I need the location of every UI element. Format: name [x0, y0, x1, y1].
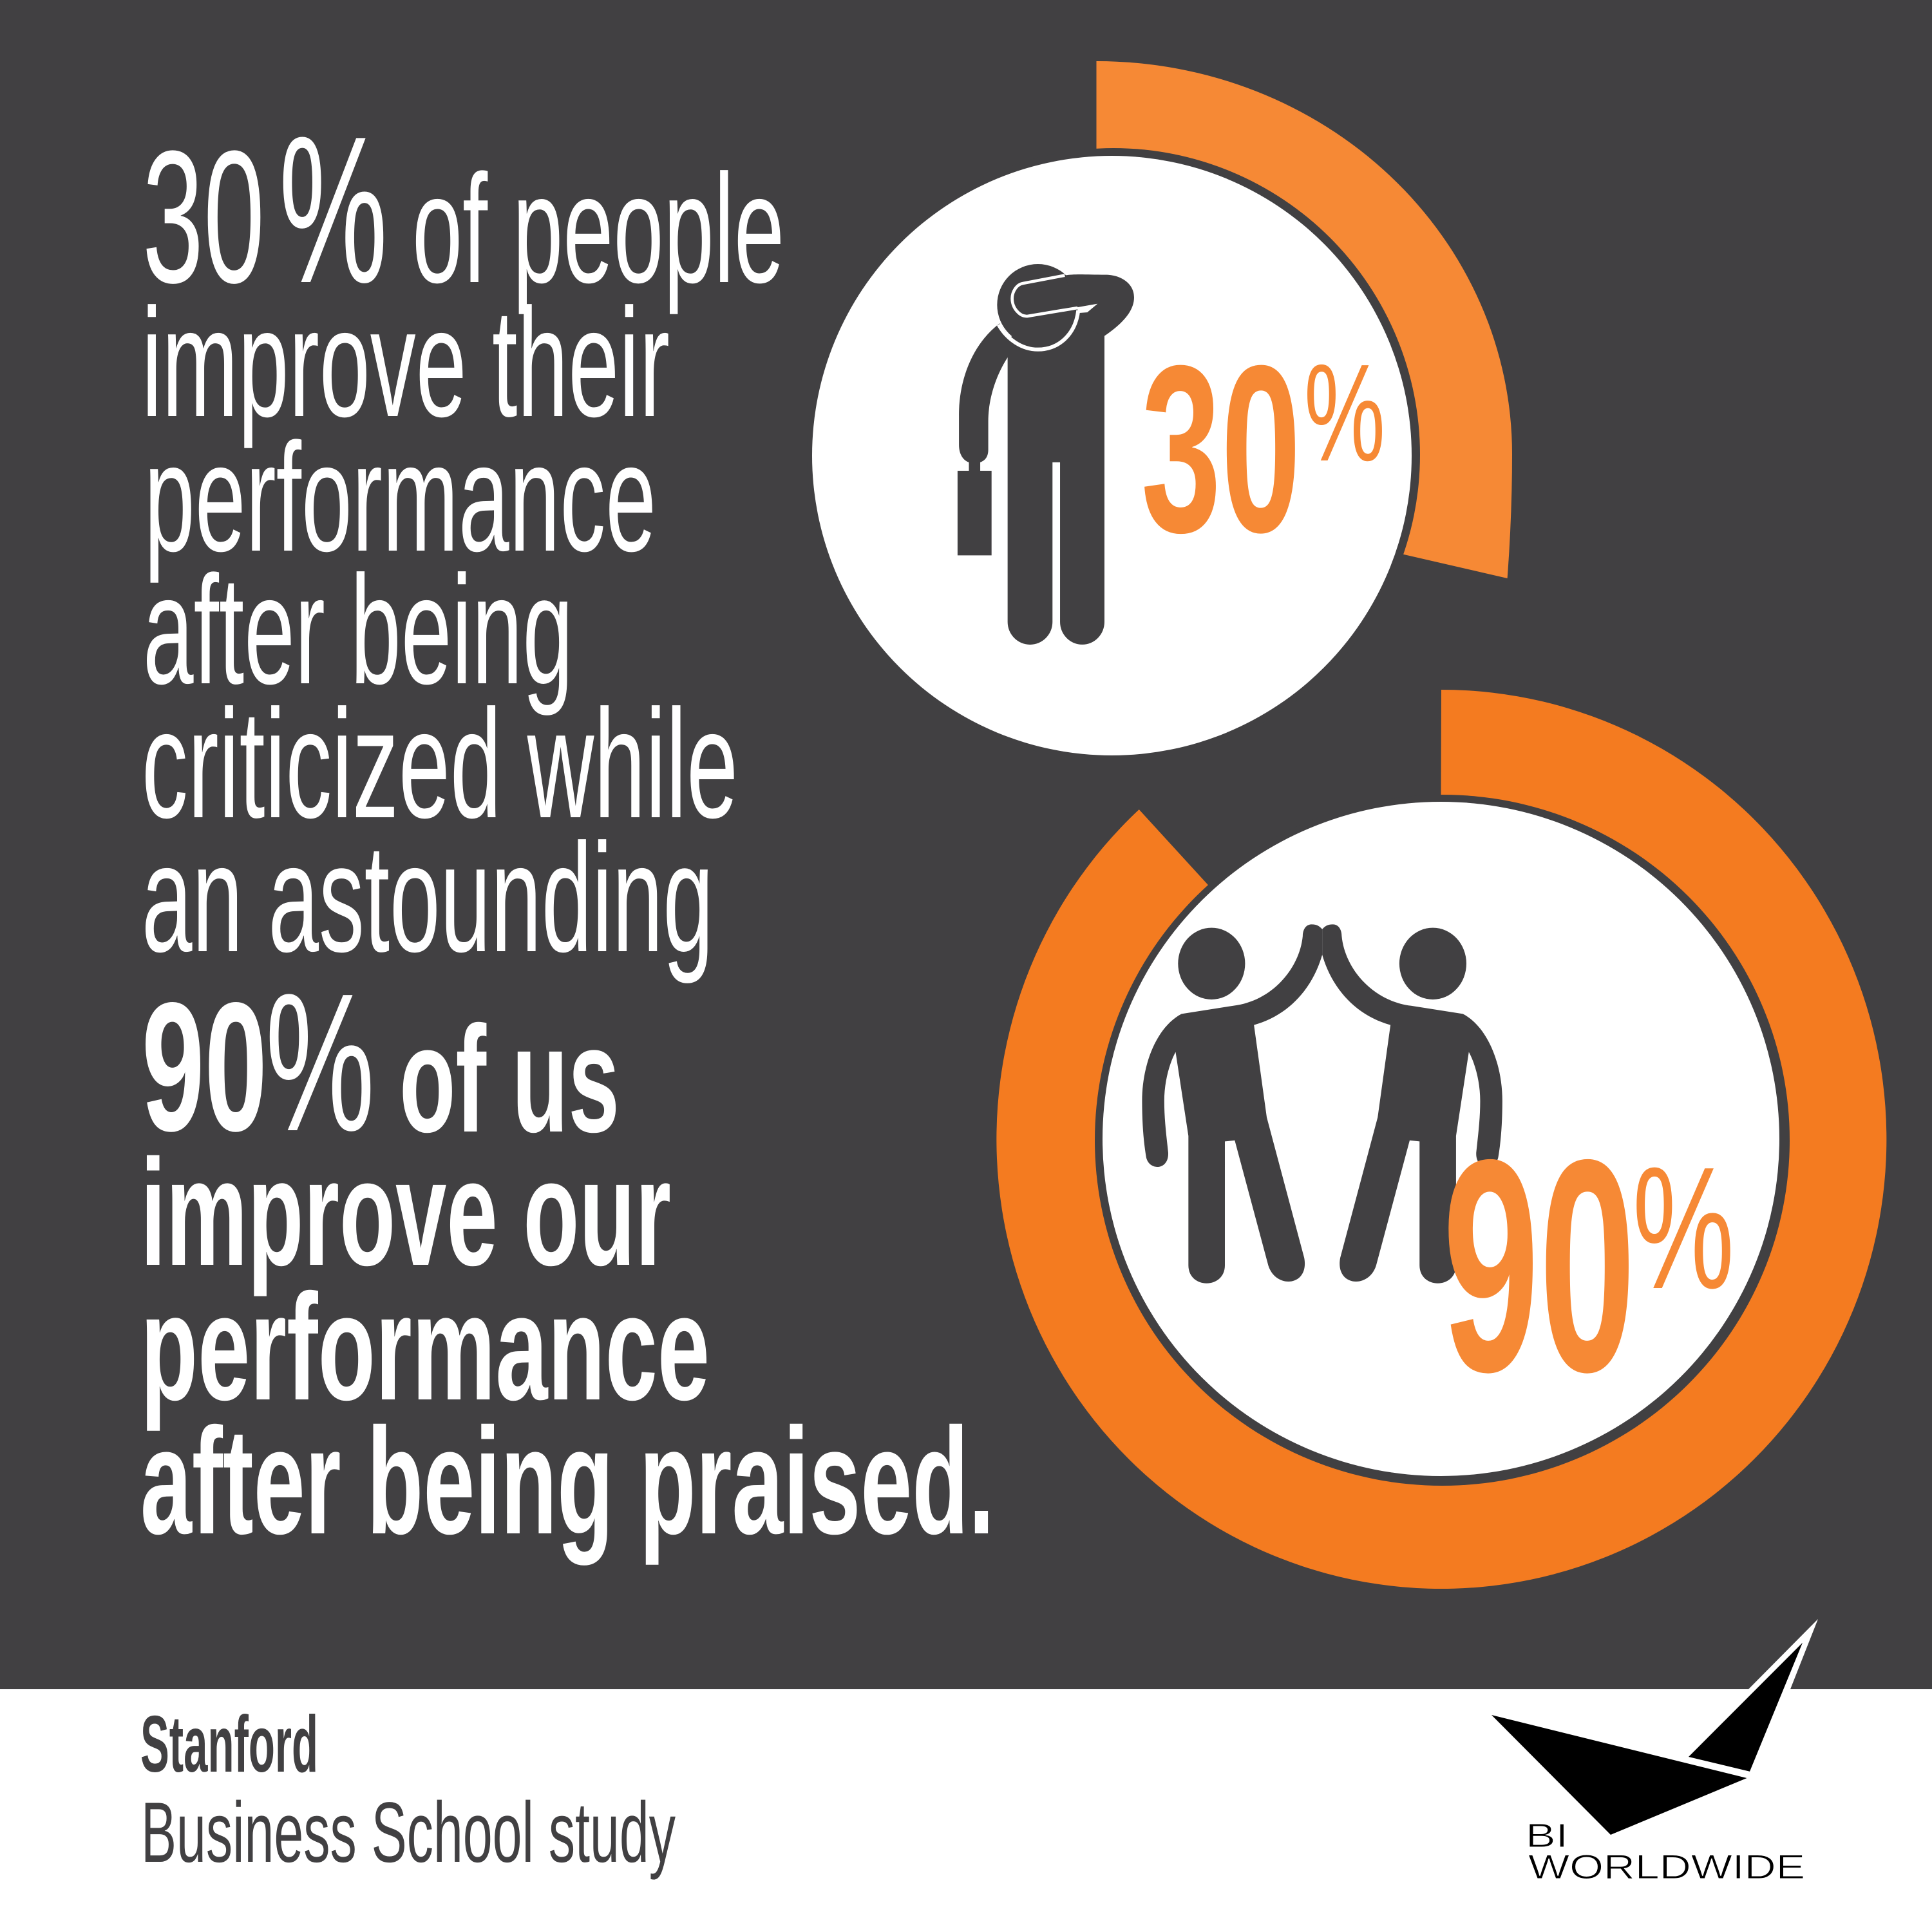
text block: main statement: [140, 93, 994, 1566]
stat: 30%: %: [1304, 335, 1385, 490]
line: performance bold: performance: [140, 1262, 710, 1432]
dark ring: [807, 148, 1420, 761]
footer source: Stanford: Stanford: [140, 1700, 318, 1789]
line: criticized while: criticized while: [142, 677, 738, 850]
line: an astounding: an astounding: [142, 811, 714, 984]
stat: 90%: %: [1633, 1132, 1734, 1325]
line: improve our: improve our: [140, 1128, 671, 1297]
line: 30% of people: [142, 93, 784, 327]
logo large triangle: [1492, 1715, 1747, 1835]
white circle: [812, 156, 1412, 755]
logo text BI: BI: [1526, 1817, 1568, 1855]
orange arc 90 percent: [996, 690, 1886, 1589]
line: 30% of people: 30: [142, 112, 265, 323]
stat: 90%: 90: [1443, 1097, 1636, 1435]
icon: two people high-fiving: [1142, 924, 1502, 1283]
line: improve their: improve their: [142, 276, 670, 449]
orange arc 30 percent: [1096, 61, 1512, 578]
dark ring: [1095, 795, 1790, 1486]
logo: BI Worldwide: [1492, 1619, 1818, 1886]
panel: criticism statistic circle: [807, 61, 1512, 761]
logo upper triangle: [1689, 1643, 1803, 1772]
footer source: Business School study: Business School study: [141, 1785, 676, 1880]
logo wing outline: [1748, 1619, 1818, 1689]
line: 30% of people: of people: [412, 142, 784, 315]
line: 90% of us: %: [265, 952, 375, 1172]
white circle: [1103, 802, 1779, 1476]
line: 90% of us: 90: [142, 965, 267, 1170]
icon: dejected person with briefcase: [958, 264, 1134, 645]
line: after being praised.: after being praised.: [140, 1396, 994, 1566]
stat: 30%: 30: [1141, 316, 1301, 582]
line: after being: after being: [143, 544, 573, 716]
line: performance: performance: [144, 411, 656, 583]
logo text WORLDWIDE: WORLDWIDE: [1528, 1848, 1805, 1886]
line: 30% of people: %: [279, 93, 388, 327]
line: 90% of us: of us: [399, 994, 620, 1164]
panel: praise statistic circle: [996, 690, 1886, 1589]
line: 90% of us: [142, 952, 620, 1172]
